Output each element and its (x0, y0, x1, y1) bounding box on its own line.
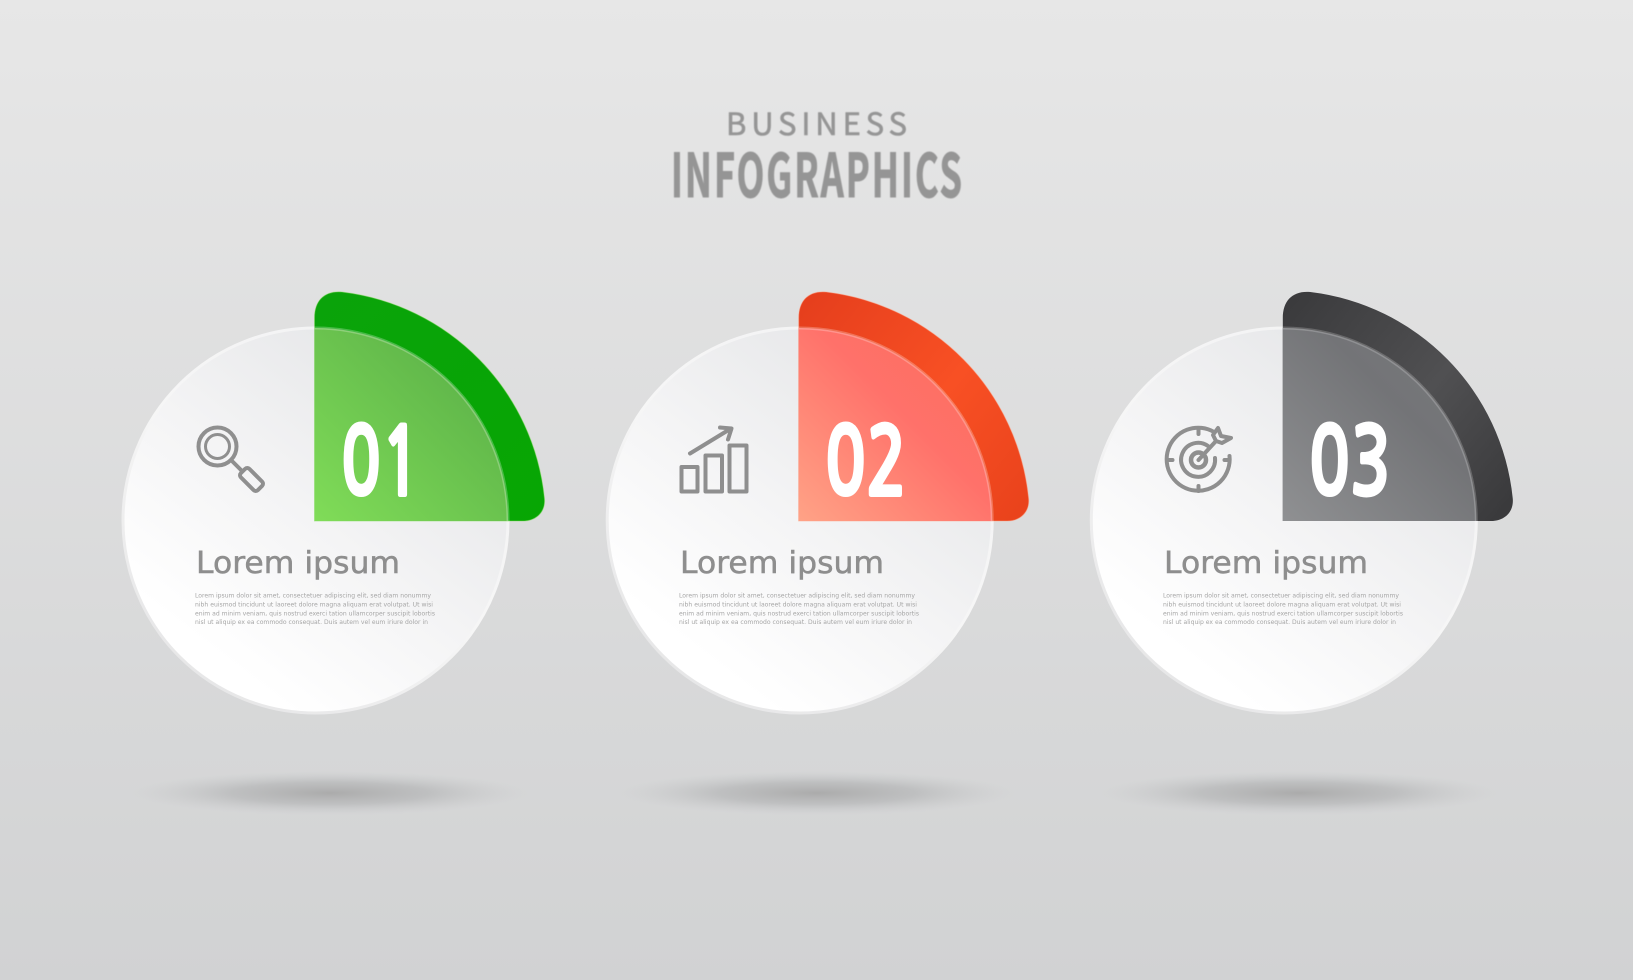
body text: nibh euismod tincidunt ut laoreet dolore magna aliquam erat volutpat. Ut wisi (1163, 602, 1401, 608)
body text (195, 592, 435, 626)
body text: Lorem ipsum dolor sit amet, consectetuer adipiscing elit, sed diam nonummy (679, 592, 915, 600)
dark quarter tab (1283, 292, 1513, 521)
panel: step 2 shadow (619, 771, 1015, 815)
heading: Lorem ipsum (680, 546, 884, 581)
body text: nisl ut aliquip ex ea commodo consequat. Duis autem vel eum iriure dolor in (195, 619, 428, 626)
icon: target with arrow (1167, 428, 1231, 491)
glass overlap (798, 326, 994, 521)
number: 03 (1309, 417, 1391, 510)
body text: Lorem ipsum dolor sit amet, consectetuer adipiscing elit, sed diam nonummy (1163, 592, 1399, 600)
title line: infographics: INFOGRAPHICS (671, 129, 962, 215)
glass circle (123, 328, 508, 713)
heading: Lorem ipsum (1164, 546, 1368, 581)
panel: step 1 (123, 292, 545, 713)
glass overlap (314, 326, 510, 521)
title line: business: BUSINESS (726, 99, 907, 144)
body text (1163, 592, 1403, 626)
icon: bar chart with arrow (682, 428, 746, 492)
number: 01 (341, 417, 421, 510)
glass circle (607, 328, 992, 713)
panel: step 3 shadow (1101, 771, 1497, 815)
glass circle (1091, 328, 1476, 713)
body text: enim ad minim veniam, quis nostrud exerci tation ullamcorper suscipit lobortis (1163, 610, 1403, 618)
panel: step 2 (607, 292, 1029, 713)
title (671, 99, 962, 215)
body text: nibh euismod tincidunt ut laoreet dolore magna aliquam erat volutpat. Ut wisi (679, 602, 917, 608)
number: 02 (825, 417, 907, 510)
body text: nisl ut aliquip ex ea commodo consequat. Duis autem vel eum iriure dolor in (679, 619, 912, 626)
body text: enim ad minim veniam, quis nostrud exerci tation ullamcorper suscipit lobortis (679, 610, 919, 618)
panel: step 3 (1091, 292, 1513, 713)
body text (679, 592, 919, 626)
glass overlap (1282, 326, 1478, 521)
body text: enim ad minim veniam, quis nostrud exerci tation ullamcorper suscipit lobortis (195, 610, 435, 618)
heading: Lorem ipsum (196, 546, 400, 581)
red quarter tab (799, 292, 1029, 521)
body text: nisl ut aliquip ex ea commodo consequat. Duis autem vel eum iriure dolor in (1163, 619, 1396, 626)
green quarter tab (314, 292, 545, 521)
panel: step 1 shadow (132, 771, 528, 815)
body text: Lorem ipsum dolor sit amet, consectetuer adipiscing elit, sed diam nonummy (195, 592, 431, 600)
body text: nibh euismod tincidunt ut laoreet dolore magna aliquam erat volutpat. Ut wisi (195, 602, 433, 608)
icon: magnifier (198, 428, 264, 492)
